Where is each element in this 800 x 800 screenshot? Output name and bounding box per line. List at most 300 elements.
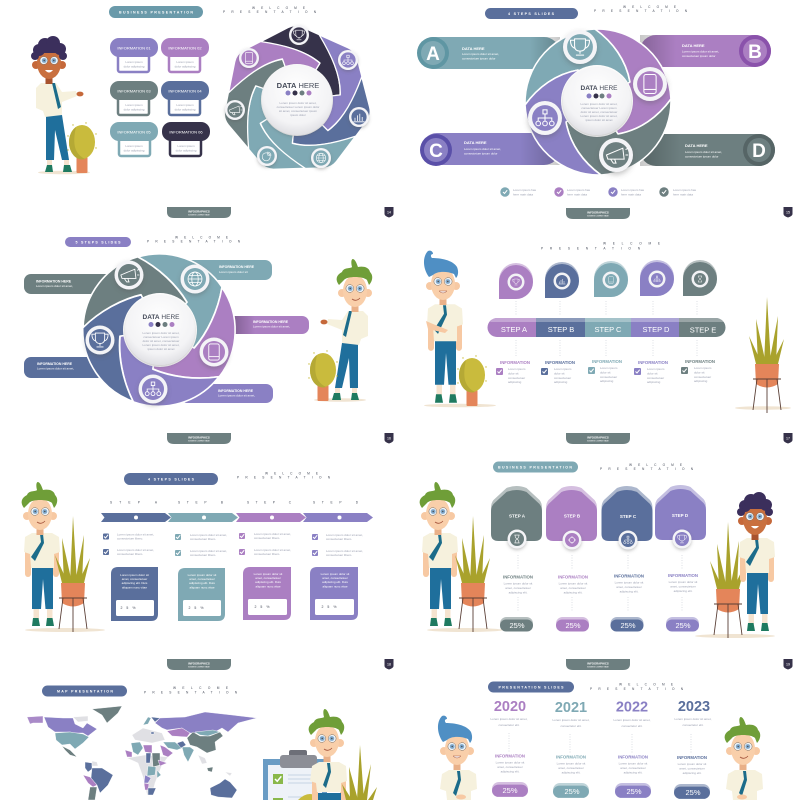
footer tab: BUSINESS COMPANY NAME — [188, 214, 210, 216]
center disc with data text: dolor sit amet, consectetuer — [143, 339, 179, 343]
information list: adipiscing — [554, 380, 568, 384]
panel: slide 16 five-step wheel — [24, 236, 394, 444]
column 2021: 2021 — [555, 700, 587, 716]
information list: consectetuer — [508, 376, 525, 380]
title pill: business presentation: BUSINESS PRESENTATION — [119, 10, 193, 14]
title pill: map presentation: MAP PRESENTATION — [57, 690, 113, 694]
information list: adipiscing — [694, 379, 708, 383]
step C column: 25% — [620, 621, 636, 630]
legend checks: Lorem ipsum has — [673, 188, 697, 192]
information list: Lorem ipsum — [647, 367, 665, 371]
pin B — [545, 262, 579, 298]
step D column: Lorem ipsum dolor sit — [669, 580, 698, 584]
page number badge — [784, 659, 792, 670]
footer tab: BUSINESS COMPANY NAME — [188, 666, 210, 668]
column 2022: adipiscing elit. — [624, 770, 643, 774]
bar: blue information: Lorem ipsum dolor sit amet, — [37, 366, 74, 370]
column 2021: amet, consectetuer — [558, 766, 584, 770]
information list: Lorem ipsum — [554, 367, 572, 371]
icon: plant on stand right — [710, 522, 745, 638]
step C column: STEP C — [620, 514, 637, 519]
information list: INFORMATION — [545, 360, 575, 365]
step bar — [488, 318, 726, 337]
information list: consectetuer — [554, 376, 571, 380]
center disc with data text: ipsum dolor sit amet — [586, 118, 613, 122]
card: information 03: INFORMATION 03 — [117, 88, 151, 94]
column 2021 — [552, 700, 590, 798]
welcome heading: PRESENTATION — [541, 246, 641, 250]
icon: trophy — [289, 25, 309, 45]
step C column: Lorem ipsum dolor sit — [254, 572, 282, 576]
column 2023: 25% — [685, 788, 701, 797]
footer tab: INFOGRAPHICS — [587, 662, 609, 666]
welcome heading: WELCOME — [252, 6, 305, 10]
welcome heading: WELCOME — [629, 463, 682, 467]
title pill: 4 steps slides — [124, 473, 218, 485]
welcome heading — [147, 236, 241, 244]
step C column: amet, consectetuer — [616, 585, 642, 589]
information list: adipiscing — [600, 379, 614, 383]
welcome heading: PRESENTATION — [594, 9, 688, 13]
step B column: adipiscing elit. — [564, 590, 583, 594]
step B column: Lorem ipsum dolor sit — [188, 573, 216, 577]
step C column: amet, consectetuer — [255, 576, 281, 580]
footer tab: BUSINESS COMPANY NAME — [587, 440, 609, 442]
step C column: aliquam nunc vitae — [255, 584, 281, 588]
character: presenter with green hair — [320, 259, 372, 400]
bar D: Lorem ipsum dolor sit amet, — [685, 150, 722, 154]
icon: bar chart — [349, 107, 369, 127]
page number badge — [784, 207, 792, 218]
page number badge — [384, 433, 394, 444]
column 2023: 2023 — [678, 699, 710, 715]
step bar: STEP A — [501, 325, 527, 334]
step B column: INFORMATION — [558, 574, 588, 580]
column 2023 — [674, 699, 712, 799]
step B column: STEP B — [564, 514, 581, 518]
icon: phone — [633, 67, 667, 101]
bar B: B — [748, 42, 762, 63]
center disc with data text: Lorem ipsum dolor sit amet, — [279, 101, 317, 105]
step D column: amet, consectetuer — [322, 576, 348, 580]
bar B: DATA HERE — [682, 43, 705, 48]
icon: plant on stand — [55, 516, 90, 632]
information list: dolor sit — [508, 372, 519, 376]
bar C: C — [429, 141, 443, 162]
icon: megaphone — [599, 138, 633, 172]
card: information 02: dolor adipiscing — [175, 64, 196, 68]
step A column: STEP A — [110, 500, 158, 504]
icon: globe — [180, 264, 210, 294]
welcome heading — [237, 472, 331, 480]
column 2020 — [490, 699, 528, 797]
welcome heading: PRESENTATION — [600, 467, 694, 471]
information list: INFORMATION — [638, 360, 668, 365]
bar: purple information: INFORMATION HERE — [253, 320, 289, 324]
column 2022: 2022 — [616, 700, 648, 716]
bar: violet information: Lorem ipsum dolor sit amet, — [218, 394, 255, 398]
bar D: consectetuer ipsum dolor — [685, 154, 719, 158]
information list: dolor sit — [600, 370, 611, 374]
pin A — [499, 263, 533, 299]
step C column: 25% — [254, 605, 274, 609]
information list: Lorem ipsum — [508, 367, 526, 371]
bar D: DATA HERE — [685, 143, 708, 148]
step B column: STEP B — [178, 500, 223, 504]
icon: phone — [239, 48, 259, 68]
step bar: STEP E — [690, 326, 716, 334]
card: information 03: dolor adipiscing — [124, 108, 145, 112]
step C column: adipiscing elit. — [620, 590, 639, 594]
icon: globe — [311, 148, 331, 168]
page number badge: 16 — [387, 436, 391, 440]
step A column: aliquam nunc vitae — [122, 586, 147, 590]
step D column: Lorem ipsum dolor sit — [321, 572, 350, 576]
information list: Lorem ipsum — [600, 366, 618, 370]
title pill: 4 steps slides — [485, 8, 578, 19]
panel: slide 14 seven-part wheel — [31, 6, 394, 218]
step B column: amet, consectetuer — [560, 586, 586, 590]
chart: four-blade spiral wheel — [525, 29, 671, 175]
card: information 01: Lorem ipsum — [125, 60, 143, 64]
step D column — [303, 500, 373, 620]
step C column: adipiscing elit. Duis — [255, 580, 281, 584]
step D column: adipiscing elit. — [674, 589, 693, 593]
center disc with data text: ipsum dolor sit amet — [148, 347, 175, 351]
bar: violet information: INFORMATION HERE — [218, 389, 254, 393]
information list: dolor sit — [694, 370, 705, 374]
icon: flow chart — [528, 101, 562, 135]
card: information 02: Lorem ipsum — [176, 60, 194, 64]
welcome heading — [541, 242, 660, 250]
column 2023: amet, consectetuer — [679, 766, 705, 770]
information list: dolor sit — [554, 372, 565, 376]
card: information 06: INFORMATION 06 — [169, 130, 203, 134]
center disc with data text: DATA HERE — [143, 314, 180, 321]
center disc with data text: ipsum dolor — [290, 113, 306, 117]
pin D — [640, 260, 674, 296]
column 2023: Lorem ipsum dolor sit amet, — [674, 717, 712, 721]
column 2021: INFORMATION — [556, 754, 586, 760]
step C column: STEP C — [247, 500, 292, 504]
title pill: map presentation — [42, 686, 127, 696]
bar C: Lorem ipsum dolor sit amet, — [464, 147, 501, 151]
step C column — [236, 500, 306, 620]
step bar: STEP B — [548, 325, 574, 334]
clipboard illustration — [263, 750, 327, 800]
step D column: amet, consectetuer — [670, 584, 696, 588]
footer tab: INFOGRAPHICS — [587, 210, 609, 214]
bar B — [640, 35, 771, 67]
step B column: amet, consectetuer — [189, 577, 215, 581]
step B column: 25% — [188, 606, 208, 610]
step A column: adipiscing elit. — [509, 590, 528, 594]
step A column — [491, 486, 542, 632]
icon: flow chart — [138, 374, 168, 404]
character: green hair — [22, 482, 60, 626]
legend checks: Lorem ipsum has — [513, 188, 537, 192]
legend checks: here main data — [513, 192, 533, 196]
icon: cactus — [67, 122, 97, 173]
page number badge — [784, 433, 792, 444]
step B column: Lorem ipsum dolor sit — [559, 582, 588, 586]
information list: consectetuer — [647, 376, 664, 380]
bar D — [640, 134, 775, 166]
title pill: presentation slides — [488, 682, 574, 692]
card: information 05: Lorem ipsum — [125, 144, 143, 148]
bar: blue information — [24, 357, 108, 378]
pin E — [683, 260, 717, 296]
step A column: Lorem ipsum dolor sit — [120, 573, 149, 577]
step D column: consectetuer libero. — [326, 553, 352, 557]
column 2021: Lorem ipsum dolor sit — [557, 762, 586, 766]
step B column: consectetuer libero. — [190, 553, 216, 557]
title pill: 5 steps slides — [65, 237, 131, 247]
column 2022: Lorem ipsum dolor sit amet, — [613, 718, 651, 722]
bar C: consectetuer ipsum dolor — [464, 152, 498, 156]
column 2022: consectetur elit. — [621, 724, 643, 728]
step A column: Lorem ipsum dolor sit amet, — [117, 532, 154, 536]
center disc with data text: dolor sit amet, consectetuer — [581, 110, 617, 114]
footer tab: INFOGRAPHICS — [188, 436, 210, 440]
title pill: business presentation: BUSINESS PRESENTATION — [498, 466, 572, 470]
card: information 01: dolor adipiscing — [124, 64, 145, 68]
panel: slide 15 four-step wheel — [417, 5, 792, 219]
panel: slide 19 four house steps — [420, 462, 792, 670]
center disc with data text: Lorem ipsum dolor sit amet, — [142, 343, 180, 347]
legend checks: Lorem ipsum has — [621, 188, 645, 192]
information cards grid — [110, 38, 210, 156]
center disc with data text: consectetuer Lorem ipsum dolor — [277, 105, 319, 109]
card: information 05: dolor adipiscing — [124, 148, 145, 152]
bar A: DATA HERE — [462, 46, 485, 51]
information list: consectetuer — [694, 375, 711, 379]
icon: plant on stand — [749, 297, 784, 413]
step A column: amet, consectetuer — [122, 577, 147, 581]
welcome heading: PRESENTATION — [144, 690, 238, 694]
bar D: D — [752, 141, 766, 162]
footer tab — [566, 433, 630, 444]
bar C — [420, 133, 560, 166]
panel: slide 21 timeline years — [438, 682, 763, 800]
footer tab — [167, 433, 231, 444]
title pill: 4 steps slides: 4 STEPS SLIDES — [508, 12, 555, 16]
information list: dolor sit — [647, 372, 658, 376]
bar C: DATA HERE — [464, 140, 487, 145]
welcome heading — [594, 5, 688, 13]
step pins — [499, 260, 717, 299]
step D column: adipiscing elit. Duis — [322, 580, 348, 584]
title pill: business presentation — [109, 6, 203, 18]
welcome heading — [223, 6, 317, 14]
step B column — [546, 486, 597, 632]
column 2020: INFORMATION — [495, 754, 525, 758]
icon: trophy — [563, 30, 597, 64]
welcome heading: PRESENTATION — [237, 476, 331, 480]
legend checks: here main data — [621, 192, 641, 196]
column 2020: 25% — [502, 786, 518, 795]
step B column: Lorem ipsum dolor sit amet, — [190, 549, 227, 553]
step D column — [655, 485, 706, 632]
column 2020: amet, consectetuer — [497, 765, 523, 769]
card: information 04: dolor adipiscing — [175, 108, 196, 112]
character: presenter with curly hair — [31, 36, 84, 172]
title pill: presentation slides: PRESENTATION SLIDES — [498, 686, 564, 690]
card: information 03 — [110, 81, 158, 115]
information list: adipiscing — [508, 380, 522, 384]
center disc with data text — [561, 65, 633, 137]
step C column — [602, 486, 652, 632]
step B column — [168, 500, 238, 621]
bar A: Lorem ipsum dolor sit amet, — [462, 52, 499, 56]
legend checks: here main data — [673, 192, 693, 196]
bar: purple information — [225, 316, 309, 334]
card: information 01 — [110, 38, 158, 72]
card: information 06: dolor adipiscing — [176, 148, 197, 152]
welcome heading: WELCOME — [603, 242, 660, 246]
step bar: STEP C — [595, 325, 622, 334]
column 2021: adipiscing elit. — [562, 770, 581, 774]
information list: INFORMATION — [500, 360, 530, 365]
welcome heading: PRESENTATION — [590, 687, 684, 691]
step A column — [101, 500, 171, 621]
welcome heading — [590, 682, 684, 691]
step bar: STEP D — [643, 325, 670, 334]
icon: plant — [342, 745, 377, 800]
card: information 03: Lorem ipsum — [125, 103, 143, 107]
icon: plant on stand — [455, 516, 490, 632]
chart: seven-blade spiral wheel — [215, 20, 382, 186]
center disc with data text: consectetuer Lorem ipsum — [143, 335, 179, 339]
character: green hair — [309, 709, 347, 800]
step A column: Lorem ipsum dolor sit — [504, 582, 532, 586]
bar: violet information — [180, 384, 273, 403]
icon: cactus — [308, 350, 338, 401]
column 2023: Lorem ipsum dolor sit — [678, 762, 706, 766]
information list: adipiscing — [647, 380, 661, 384]
center disc with data text: DATA HERE — [581, 85, 618, 92]
icon: cactus — [457, 355, 487, 406]
footer tab: INFOGRAPHICS — [188, 210, 210, 214]
step A column: amet, consectetuer — [505, 586, 531, 590]
welcome heading: WELCOME — [619, 682, 673, 686]
welcome heading — [144, 686, 238, 694]
footer tab — [167, 207, 231, 218]
column 2021: Lorem ipsum dolor sit amet, — [552, 718, 590, 722]
information list — [496, 359, 715, 384]
icon: megaphone — [225, 100, 245, 120]
card: information 05: INFORMATION 05 — [117, 130, 151, 134]
step A column: Lorem ipsum dolor sit amet, — [117, 548, 154, 552]
center disc with data text: Lorem ipsum dolor sit amet, — [580, 114, 618, 118]
bar: grey information: Lorem ipsum dolor sit amet, — [36, 284, 73, 288]
step A column: INFORMATION — [503, 574, 533, 580]
welcome heading: WELCOME — [175, 236, 228, 240]
bar: blue information: INFORMATION HERE — [37, 362, 73, 366]
center disc with data text: Lorem ipsum dolor sit amet, — [142, 331, 180, 335]
character: blue hair — [438, 716, 477, 800]
character: curly hair — [737, 492, 775, 631]
title pill: business presentation — [493, 462, 578, 472]
footer tab: INFOGRAPHICS — [587, 436, 609, 440]
card: information 05 — [110, 122, 158, 156]
icon: phone — [200, 338, 228, 366]
column 2022: 25% — [626, 787, 642, 796]
welcome heading: WELCOME — [265, 472, 318, 476]
page number badge: 19 — [786, 662, 790, 666]
column 2022: Lorem ipsum dolor sit — [619, 762, 648, 766]
legend checks: here main data — [567, 192, 587, 196]
card: information 06: Lorem ipsum — [177, 144, 195, 148]
welcome heading: PRESENTATION — [147, 240, 241, 244]
column 2023: INFORMATION — [677, 755, 707, 760]
icon: megaphone — [114, 260, 144, 290]
step A column: consectetuer libero. — [117, 536, 143, 540]
step D column: 25% — [675, 621, 691, 630]
panel: slide 17 five steps timeline — [424, 242, 792, 444]
step A column: adipiscing elit. Duis — [122, 581, 148, 585]
legend checks: Lorem ipsum has — [567, 188, 591, 192]
title pill: 4 steps slides: 4 STEPS SLIDES — [148, 478, 195, 482]
welcome heading: WELCOME — [623, 5, 676, 9]
step C column: Lorem ipsum dolor sit amet, — [254, 548, 291, 552]
welcome heading: WELCOME — [173, 686, 228, 690]
icon: flow chart — [338, 50, 358, 70]
icon: trophy — [86, 326, 114, 354]
column 2020: adipiscing elit. — [501, 770, 520, 774]
column 2022: INFORMATION — [618, 754, 648, 760]
welcome heading: PRESENTATION — [223, 10, 317, 14]
column 2020: Lorem ipsum dolor sit amet, — [490, 717, 528, 721]
step D column: 25% — [321, 605, 341, 609]
character: blue hair — [424, 251, 463, 403]
column 2022 — [613, 700, 651, 798]
step A column: 25% — [509, 621, 525, 630]
step B column: consectetuer libero. — [190, 537, 216, 541]
center disc with data text: DATA HERE — [277, 81, 319, 90]
legend checks — [500, 187, 697, 197]
card: information 04: INFORMATION 04 — [168, 88, 202, 94]
panel: slide 18 four step arrows — [22, 472, 393, 670]
step B column: 25% — [565, 621, 581, 630]
panel: slide 20 world map — [27, 686, 377, 800]
character: green hair — [420, 482, 458, 626]
step C column: INFORMATION — [614, 574, 644, 578]
bar: purple information: Lorem ipsum dolor sit amet, — [253, 324, 290, 328]
step A column: STEP A — [509, 514, 526, 518]
center disc with data text — [123, 293, 197, 367]
center disc with data text: sit amet, consectetuer ipsum — [279, 109, 318, 113]
bar: teal information — [185, 260, 272, 280]
bar A: consectetuer ipsum dolor — [462, 56, 496, 60]
card: information 01: INFORMATION 01 — [117, 46, 151, 50]
footer tab: BUSINESS COMPANY NAME — [188, 440, 210, 442]
card: information 04: Lorem ipsum — [176, 103, 194, 107]
icon: pie chart — [257, 146, 277, 166]
bar: teal information: INFORMATION HERE — [219, 265, 255, 269]
step D column: INFORMATION — [668, 573, 698, 578]
step D column: STEP D — [672, 513, 689, 518]
footer tab: BUSINESS COMPANY NAME — [587, 666, 609, 668]
chart: five-blade spiral wheel — [63, 247, 251, 429]
step A column: consectetuer libero. — [117, 552, 143, 556]
information list: Lorem ipsum — [694, 366, 712, 370]
footer tab — [566, 659, 630, 670]
footer tab: BUSINESS COMPANY NAME — [587, 214, 609, 218]
step C column: consectetuer libero. — [254, 536, 280, 540]
column 2021: consectetur elit. — [560, 724, 582, 728]
information list: INFORMATION — [685, 359, 715, 364]
